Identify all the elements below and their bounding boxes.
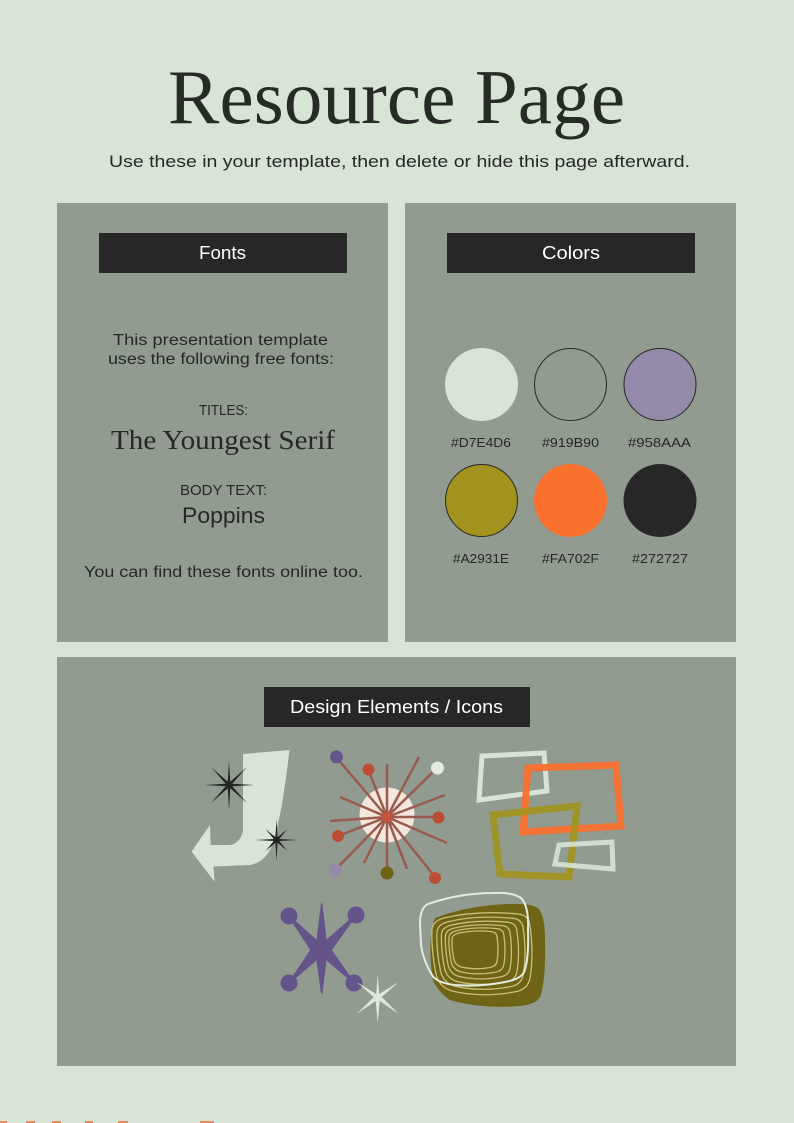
fonts note: You can find these fonts online too. bbox=[84, 564, 363, 581]
swatch 919B90 bbox=[534, 348, 606, 450]
titles font sample bbox=[111, 403, 335, 455]
subtitle: Use these in your template, then delete or hide this page afterward. bbox=[109, 152, 690, 171]
icon: white star bbox=[357, 974, 399, 1023]
colors heading: Colors bbox=[542, 243, 600, 263]
swatch A2931E: #A2931E bbox=[453, 552, 509, 566]
body font sample: BODY TEXT: bbox=[180, 483, 267, 499]
colors heading bbox=[447, 233, 695, 273]
fonts heading: Fonts bbox=[199, 243, 246, 263]
swatch 272727: #272727 bbox=[632, 552, 688, 566]
fonts intro text: This presentation template bbox=[113, 332, 328, 349]
panel: fonts bbox=[57, 203, 388, 642]
icon: arrow with stars bbox=[192, 750, 298, 882]
icon: overlapping frames bbox=[479, 753, 621, 877]
swatch 919B90: #919B90 bbox=[542, 436, 599, 450]
icon: purple star with dots bbox=[280, 904, 364, 993]
fonts intro text: uses the following free fonts: bbox=[108, 351, 334, 368]
swatch 958AAA: #958AAA bbox=[628, 436, 692, 450]
footer orange fragments bbox=[0, 1121, 214, 1123]
swatch D7E4D6 bbox=[445, 348, 518, 450]
swatch 272727 bbox=[624, 464, 696, 566]
body font sample bbox=[180, 483, 267, 528]
titles font sample: TITLES: bbox=[199, 403, 248, 419]
icon: olive blob with rings bbox=[420, 893, 545, 1007]
swatch A2931E bbox=[446, 464, 518, 566]
panel: design elements bbox=[57, 657, 736, 1066]
design elements heading bbox=[264, 687, 530, 727]
icon: atomic starburst bbox=[328, 750, 447, 884]
fonts heading bbox=[99, 233, 347, 273]
design elements heading: Design Elements / Icons bbox=[290, 697, 503, 717]
fonts intro text bbox=[108, 332, 334, 368]
panel: colors bbox=[405, 203, 736, 642]
swatch FA702F bbox=[534, 464, 607, 566]
body font sample: Poppins bbox=[182, 503, 265, 528]
swatch D7E4D6: #D7E4D6 bbox=[451, 436, 511, 450]
swatch 958AAA bbox=[624, 348, 696, 450]
title: Resource Page bbox=[168, 54, 625, 140]
titles font sample: The Youngest Serif bbox=[111, 425, 335, 455]
swatch FA702F: #FA702F bbox=[542, 552, 599, 566]
